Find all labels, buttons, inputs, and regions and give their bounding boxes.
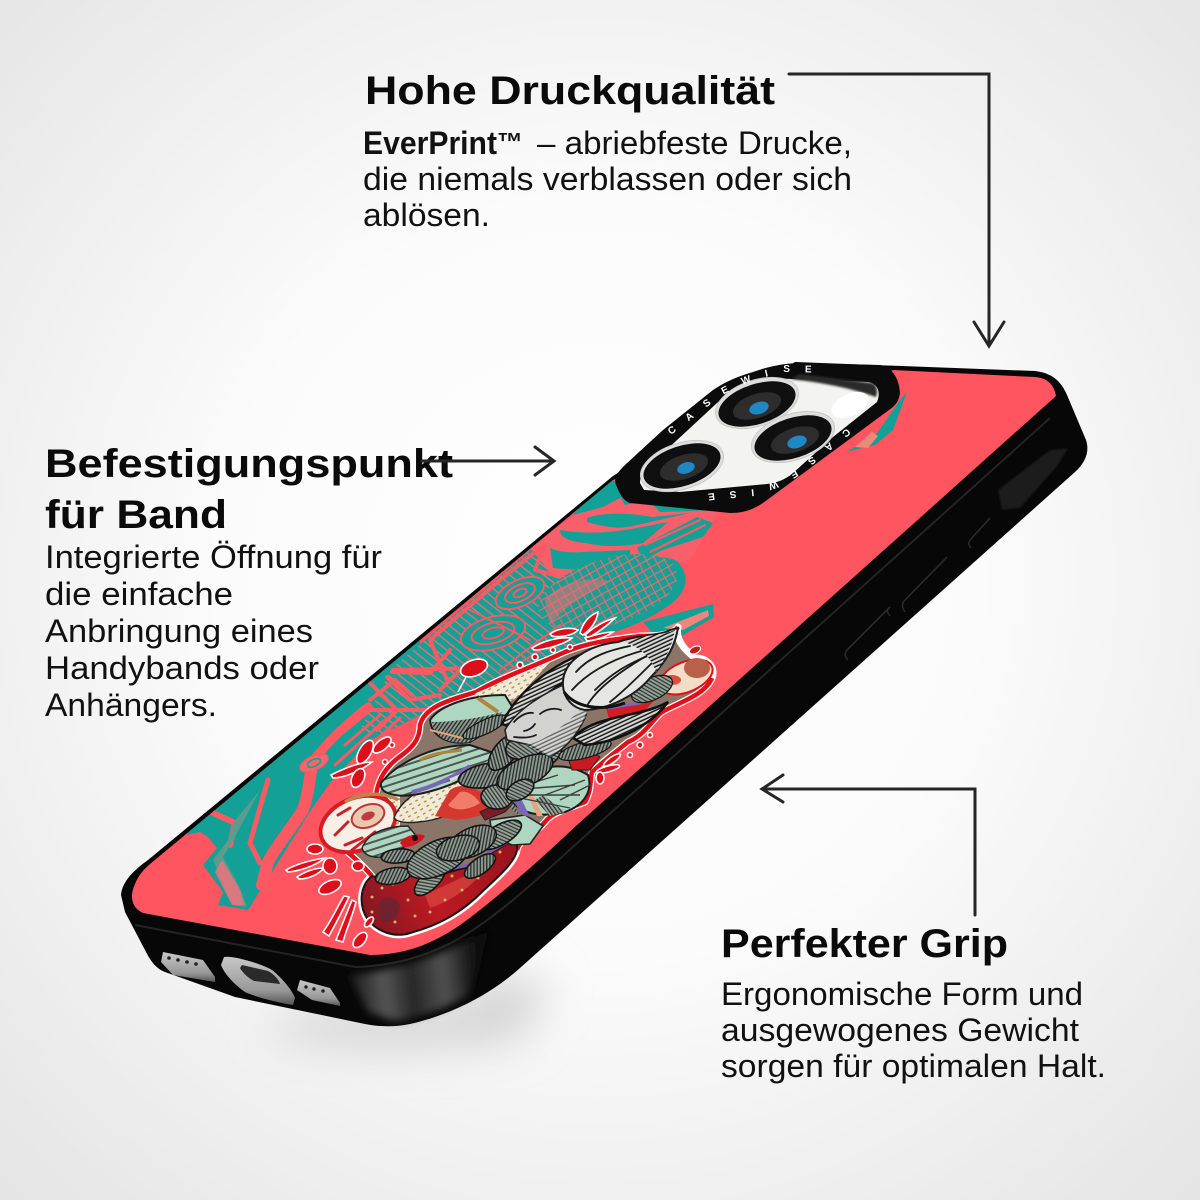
small right strawberry and leaf xyxy=(558,741,612,770)
rosette xyxy=(318,792,399,854)
usb port xyxy=(221,957,295,1005)
splash left xyxy=(331,734,394,790)
brand text on ring xyxy=(668,365,850,500)
text block: grip description: ausgewogenes Gewicht xyxy=(721,1012,1079,1048)
central leaf cluster xyxy=(458,736,562,810)
cream dotted backing xyxy=(474,662,550,702)
lower left wing xyxy=(362,826,418,857)
face xyxy=(505,682,590,757)
arrow: strap point xyxy=(422,447,554,475)
brand text on ring: CASEWISE xyxy=(668,365,812,434)
cream wedge xyxy=(393,782,462,824)
phone case xyxy=(121,362,1088,1026)
coral lines on bands xyxy=(645,520,705,552)
text block: EverPrint description: ™ xyxy=(497,127,523,157)
case body xyxy=(121,362,1087,1026)
lens 3 xyxy=(634,431,730,501)
arrow: print quality to phone top xyxy=(789,74,1004,346)
right red and purple accents xyxy=(606,700,654,718)
text block: strap opening description xyxy=(45,539,382,723)
heading: Perfekter Grip: Perfekter Grip xyxy=(721,922,1008,966)
hair left sweep xyxy=(500,653,581,727)
lower leaf cluster xyxy=(374,819,522,896)
text block: EverPrint description: die niemals verblassen oder sich xyxy=(363,161,852,197)
mid wing xyxy=(380,744,492,797)
camera inner plate xyxy=(640,378,879,492)
text block: EverPrint description: EverPrint xyxy=(363,125,497,161)
heading: Hohe Druckqualität: Hohe Druckqualität xyxy=(365,69,775,113)
lens 2 xyxy=(745,402,841,472)
small right rosette xyxy=(662,658,714,696)
red heart xyxy=(435,786,510,821)
text block: strap opening description: die einfache xyxy=(45,576,233,612)
text block: EverPrint description xyxy=(363,125,852,233)
heading: Befestigungspunkt für Band: Befestigungspunkt xyxy=(45,442,453,486)
rose motifs xyxy=(460,576,561,678)
drops xyxy=(317,656,490,950)
lower mint block xyxy=(490,815,543,845)
mint fan xyxy=(505,766,590,817)
hair upper shell xyxy=(563,628,678,710)
upper wing xyxy=(430,695,513,743)
arrow: grip to phone side xyxy=(762,775,975,915)
mesh dome xyxy=(538,554,677,629)
text block: EverPrint description: – abriebfeste Drucke, xyxy=(537,125,852,161)
mesh dome rim xyxy=(574,558,686,636)
left speaker xyxy=(161,952,215,982)
phone drop shadow xyxy=(270,963,555,1061)
small left leaf xyxy=(462,714,505,740)
side button ridge and lip highlights xyxy=(135,418,1050,967)
spike near hair xyxy=(643,604,714,636)
lower-left coral strokes xyxy=(213,707,400,885)
brand text on ring: CASEWISE xyxy=(708,430,850,500)
coral field under camera xyxy=(530,498,718,578)
text block: strap opening description: Anhängers. xyxy=(45,687,217,723)
screen coral print xyxy=(132,370,1056,955)
splash right xyxy=(596,732,652,784)
lens 1 xyxy=(709,368,805,438)
swirl xyxy=(299,754,329,773)
text block: EverPrint description: ablösen. xyxy=(363,197,490,233)
illustration outline xyxy=(328,627,713,935)
text block: grip description xyxy=(721,976,1106,1084)
teal lower silhouette xyxy=(187,543,537,910)
teal mid area with coral line mix xyxy=(360,545,600,735)
glossy bottom corner xyxy=(349,930,490,1021)
small bird xyxy=(400,834,425,847)
teal zebra bands xyxy=(550,480,713,570)
teal background art xyxy=(187,392,907,910)
muted grey-teal spike xyxy=(213,790,260,907)
text block: grip description: Ergonomische Form und xyxy=(721,976,1083,1012)
hair lower sweep xyxy=(573,702,668,745)
splash top xyxy=(517,612,615,668)
illustration: woman with leaves and strawberry xyxy=(286,612,718,950)
camera island xyxy=(615,363,900,513)
text block: grip description: sorgen für optimalen Halt. xyxy=(721,1048,1106,1084)
branches xyxy=(337,545,555,737)
heading: Befestigungspunkt für Band xyxy=(45,442,453,537)
lanyard attachment recess xyxy=(998,448,1068,510)
text block: strap opening description: Handybands oder xyxy=(45,650,319,686)
text block: strap opening description: Anbringung eines xyxy=(45,613,313,649)
heading: Befestigungspunkt für Band: für Band xyxy=(45,493,227,537)
red splashes xyxy=(286,612,702,950)
strawberry xyxy=(362,841,517,935)
text block: strap opening description: Integrierte Öffnung für xyxy=(45,539,382,575)
right leaf cluster xyxy=(630,674,674,704)
splash lower left xyxy=(286,844,364,879)
teal by camera xyxy=(846,392,907,452)
right speaker xyxy=(297,980,340,1006)
charging port and speakers xyxy=(161,952,340,1006)
